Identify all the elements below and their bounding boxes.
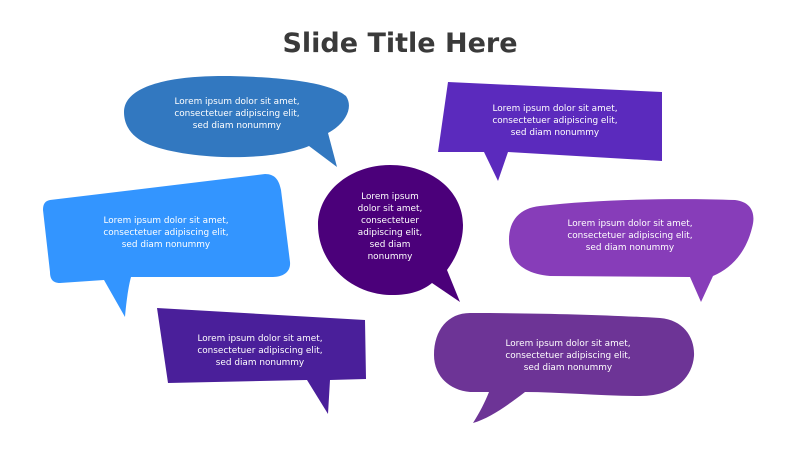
bubble: top-left blue [124,76,349,167]
bubble: bottom-left purple: Lorem ipsum dolor sit amet, [197,334,323,344]
bubble: center dark purple: Lorem ipsum [361,192,419,202]
bubble: bottom-left purple: consectetuer adipiscing elit, [197,346,323,356]
bubble: bottom-right purple: sed diam nonummy [524,363,612,373]
bubble: bottom-right purple: consectetuer adipiscing elit, [505,351,631,361]
bubble: middle-right violet: sed diam nonummy [586,243,674,253]
bubble: center dark purple: nonummy [368,252,412,262]
bubble: center dark purple: sed diam [370,240,410,250]
bubble: top-left blue: Lorem ipsum dolor sit amet, [174,97,300,107]
bubble: top-right purple: Lorem ipsum dolor sit amet, [492,104,618,114]
bubble: center dark purple [318,165,463,302]
bubble: left light blue: Lorem ipsum dolor sit amet, [103,216,229,226]
bubble: center dark purple: consectetuer [361,216,419,226]
bubble: left light blue [43,174,290,317]
bubble: left light blue: consectetuer adipiscing elit, [103,228,229,238]
bubble: top-right purple [438,82,662,181]
bubble: top-right purple: sed diam nonummy [511,128,599,138]
bubble: top-left blue: sed diam nonummy [193,121,281,131]
bubble: center dark purple: dolor sit amet, [358,204,422,214]
bubble: bottom-right purple [434,313,694,423]
bubble: center dark purple: adipiscing elit, [358,228,422,238]
title: Slide Title Here [282,28,518,59]
bubble: left light blue: sed diam nonummy [122,240,210,250]
bubble: middle-right violet: Lorem ipsum dolor sit amet, [567,219,693,229]
bubble: bottom-left purple [157,308,366,414]
bubble: top-right purple: consectetuer adipiscing elit, [492,116,618,126]
bubble: middle-right violet: consectetuer adipiscing elit, [567,231,693,241]
bubble: bottom-right purple: Lorem ipsum dolor sit amet, [505,339,631,349]
bubble: top-left blue: consectetuer adipiscing elit, [174,109,300,119]
bubble: middle-right violet [509,199,753,302]
bubble: bottom-left purple: sed diam nonummy [216,358,304,368]
